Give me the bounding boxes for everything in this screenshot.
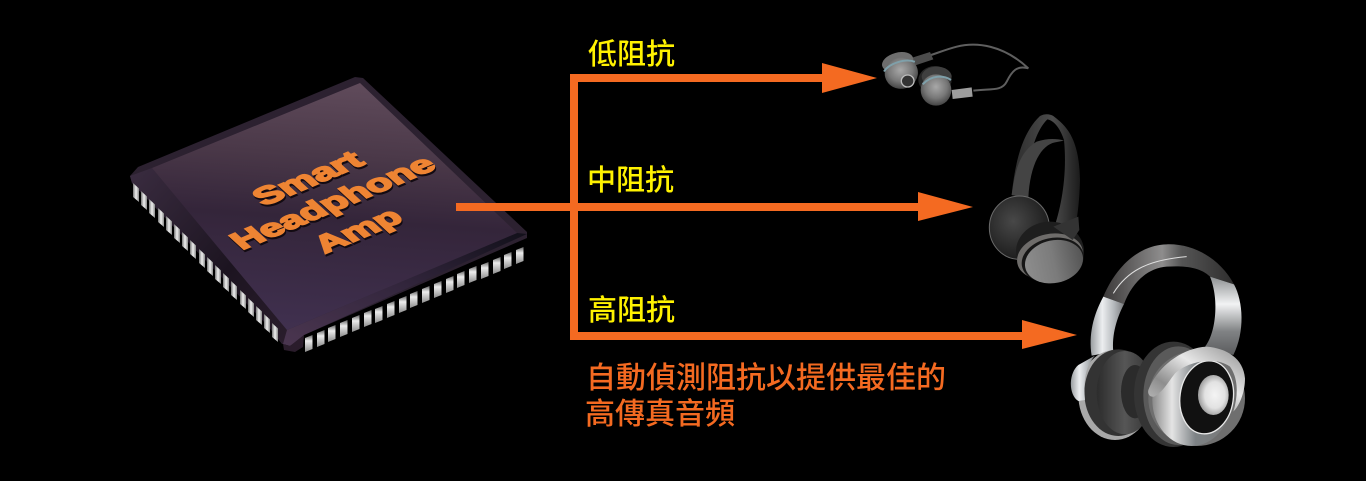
caption: 高傳真音頻 bbox=[585, 398, 735, 431]
chip: Smart Headphone Amp bbox=[130, 77, 527, 352]
chip label: Amp bbox=[307, 205, 411, 260]
ear cup centre knob bbox=[1198, 375, 1229, 415]
arrows: signal routing bbox=[456, 63, 1077, 349]
arrow to earbuds bbox=[570, 63, 877, 93]
label: mid impedance: 中阻抗 bbox=[587, 164, 674, 197]
chip pins: left side bbox=[133, 183, 278, 342]
label: high impedance: 高阻抗 bbox=[588, 294, 675, 327]
chip label: Smart bbox=[246, 148, 373, 213]
ear cup dark plate bbox=[1175, 357, 1238, 437]
chip label: Headphone bbox=[223, 151, 443, 255]
right bud bbox=[922, 67, 952, 87]
back band bbox=[1012, 114, 1080, 240]
headband left slider bbox=[1091, 297, 1124, 356]
arrow to mid headphones bbox=[570, 192, 973, 221]
yoke bbox=[1148, 347, 1245, 412]
chip top face bbox=[152, 83, 517, 330]
icon: earbuds bbox=[880, 45, 1028, 106]
right ear cup bbox=[1016, 222, 1084, 282]
chip label: Headphone bbox=[224, 153, 444, 257]
left ear cup bbox=[1071, 349, 1153, 440]
left ear cup bbox=[989, 196, 1049, 259]
headband top bbox=[1103, 244, 1234, 304]
right ear cup bbox=[1134, 342, 1245, 447]
left bud bbox=[880, 48, 921, 93]
trunk line from chip bbox=[456, 203, 576, 211]
chip label: Smart bbox=[245, 146, 372, 211]
headband right slider bbox=[1205, 277, 1242, 355]
chip pins: right side bbox=[305, 247, 524, 352]
vertical branch bbox=[570, 74, 578, 340]
caption: 自動偵測阻抗以提供最佳的 bbox=[586, 362, 946, 395]
chip label: Amp bbox=[306, 203, 410, 258]
icon: large headphones bbox=[1071, 244, 1245, 447]
icon: mid-size headphones bbox=[989, 114, 1088, 289]
label: low impedance: 低阻抗 bbox=[588, 38, 675, 71]
chip body bevel bbox=[130, 77, 527, 352]
inner band bbox=[1012, 139, 1064, 198]
arrow to large headphones bbox=[570, 320, 1077, 349]
ear cup face bbox=[1021, 235, 1087, 289]
caption bbox=[585, 362, 946, 431]
